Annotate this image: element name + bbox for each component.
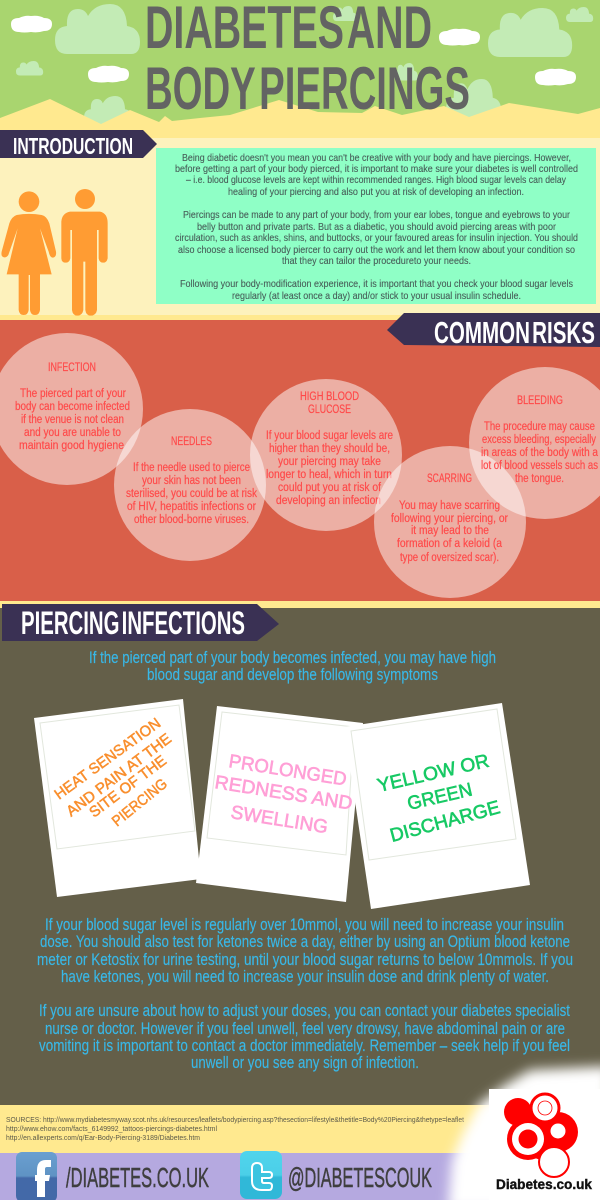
risk: bleeding: BLEEDING [517, 395, 563, 407]
intro text: symptoms [89, 649, 496, 684]
risk: needles: If the needle used to pierce [133, 462, 250, 474]
panel: social footer [0, 1151, 600, 1200]
panel: header sky [0, 0, 600, 140]
risk: high blood glucose: longer to heal, which in turn [266, 469, 392, 481]
risk: scarring: SCARRING [427, 473, 472, 485]
background clouds [16, 4, 593, 126]
panel: piercing infections [0, 601, 600, 1105]
polaroid: yellow or green discharge: GREEN [405, 780, 474, 815]
polaroid: yellow or green discharge: YELLOW OR [375, 751, 491, 797]
intro text: symptoms: blood sugar and develop the following symptoms [147, 666, 438, 684]
text box: introduction copy [156, 148, 596, 304]
risk: high blood glucose: HIGH BLOOD [300, 391, 359, 403]
risk: needles: sterilised, you could be at risk [126, 488, 257, 500]
risk: high blood glucose [250, 379, 402, 531]
text box: introduction copy: healing of your piercing and also put you at risk of developing an infection. [228, 186, 524, 198]
heading: piercing infections banner: PIERCING INFECTIONS [21, 605, 245, 641]
facebook handle: /DIABETES.CO.UK [66, 1162, 209, 1193]
panel: common risks [0, 313, 600, 601]
risk: infection: maintain good hygiene [19, 440, 124, 452]
risk: infection: body can become infected [15, 401, 130, 413]
title [145, 0, 470, 122]
risk: needles: other blood-borne viruses. [134, 514, 249, 526]
heading: piercing infections banner [2, 604, 279, 641]
polaroid: heat sensation [34, 699, 201, 897]
intro text: symptoms: If the pierced part of your body becomes infected, you may have high [89, 649, 496, 667]
risk: scarring: following your piercing, or [391, 513, 508, 525]
risk: high blood glucose: could put you at risk of [278, 482, 382, 494]
text box: introduction copy: that they can tailor the procedureto your needs. [282, 255, 471, 267]
text box: introduction copy: regularly (at least once a day) and/or stick to your usual insulin schedule. [232, 290, 521, 302]
risk: high blood glucose: developing an infection [276, 495, 381, 507]
polaroid: heat sensation: PIERCING [109, 775, 171, 830]
twitter handle: @DIABETESCOUK [288, 1162, 432, 1193]
polaroid: heat sensation: HEAT SENSATION [51, 715, 164, 803]
polaroid: yellow or green discharge: DISCHARGE [388, 797, 502, 847]
text: seek help advice: unwell or you see any sign of infection. [191, 1054, 419, 1072]
polaroid: prolonged redness: PROLONGED [227, 751, 348, 791]
heading: introduction banner [0, 130, 157, 159]
risk: high blood glucose: higher than they should be, [269, 443, 390, 455]
polaroid: prolonged redness: SWELLING [229, 802, 329, 838]
risk: high blood glucose: GLUCOSE [308, 404, 351, 416]
risk: infection [0, 333, 143, 485]
risk: needles [114, 409, 266, 561]
icon: twitter [240, 1151, 282, 1199]
polaroid: heat sensation: SITE OF THE [86, 752, 170, 821]
risk: high blood glucose: If your blood sugar levels are [266, 430, 393, 442]
logo: diabetes.co.uk: Diabetes.co.uk [496, 1176, 592, 1192]
yellow mountains [0, 99, 600, 140]
white clouds [11, 16, 576, 86]
risk: scarring [374, 446, 526, 598]
icon: woman and man figures [1, 189, 108, 316]
panel: sources: SOURCES: http://www.mydiabetesmyway.scot.nhs.uk/resources/leaflets/bodypiercing.asp?thesection=lifestyle&thetitle=Body%20Piercing&thetype=leaflet [6, 1117, 464, 1124]
text: insulin advice [37, 916, 573, 986]
polaroid: prolonged redness [196, 706, 363, 902]
risk: bleeding [469, 367, 600, 519]
risk: high blood glucose: your piercing may take [278, 456, 381, 468]
panel: sources [0, 1105, 600, 1153]
panel: sources: http://en.allexperts.com/q/Ear-Body-Piercing-3189/Diabetes.htm [6, 1135, 200, 1142]
risk: infection: INFECTION [48, 362, 96, 374]
risk: scarring: type of oversized scar). [400, 552, 499, 564]
polaroid: heat sensation: AND PAIN AT THE [63, 730, 175, 820]
risk: needles: NEEDLES [171, 436, 212, 448]
risk: scarring: it may lead to the [411, 525, 489, 537]
panel: introduction [0, 130, 600, 320]
risk: infection: and you are unable to [24, 427, 121, 439]
polaroid: prolonged redness: REDNESS AND [213, 772, 354, 815]
risk: scarring: You may have scarring [399, 500, 500, 512]
risk: bleeding: the tongue. [515, 473, 564, 485]
risk: infection: The pierced part of your [20, 388, 126, 400]
polaroid: yellow or green discharge [344, 703, 530, 909]
heading: introduction banner: INTRODUCTION [13, 133, 133, 159]
risk: scarring: formation of a keloid (a [397, 538, 503, 550]
panel: sources: http://www.ehow.com/facts_6149992_tattoos-piercings-diabetes.html [6, 1126, 217, 1133]
icon: facebook [16, 1152, 57, 1200]
text: seek help advice [39, 1002, 570, 1072]
risk: needles: of HIV, hepatitis infections or [127, 501, 256, 513]
risk: infection: if the venue is not clean [21, 414, 124, 426]
logo: diabetes.co.uk [496, 1094, 592, 1192]
white logo backdrop [448, 1066, 600, 1200]
risk: needles: your skin has not been [142, 475, 241, 487]
